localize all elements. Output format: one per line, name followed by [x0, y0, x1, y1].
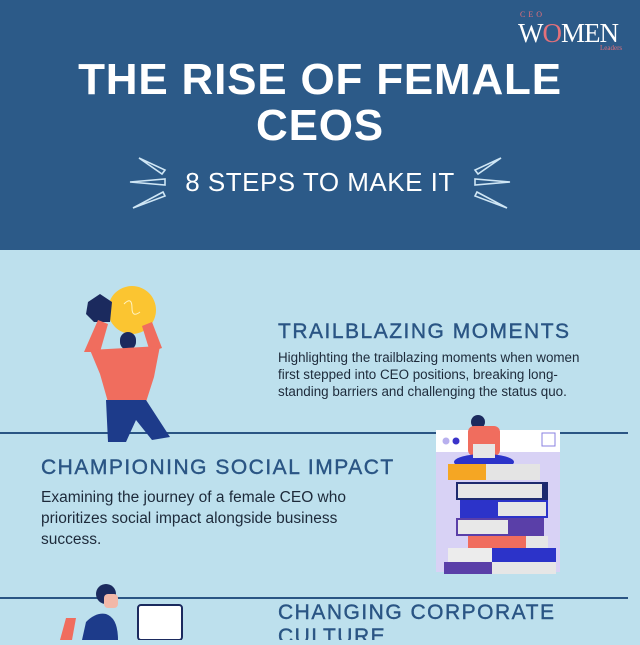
header panel	[0, 0, 640, 250]
section 1: trailblazing moments	[278, 320, 579, 399]
heading: CHAMPIONING SOCIAL IMPACT	[41, 456, 395, 479]
logo: CEO	[520, 10, 545, 19]
title	[78, 55, 562, 150]
logo: Leaders	[600, 44, 622, 52]
divider lines	[0, 432, 628, 434]
heading	[278, 601, 555, 640]
heading: TRAILBLAZING MOMENTS	[278, 320, 571, 343]
title: CEOS	[256, 101, 384, 150]
logo: WOMEN	[518, 18, 618, 48]
subtitle with burst icons	[130, 157, 510, 209]
subtitle with burst icons: 8 STEPS TO MAKE IT	[185, 167, 455, 197]
section 3: changing corporate culture	[278, 601, 555, 640]
icon: man holding lightbulb	[84, 286, 170, 442]
icon: person on stack of books	[436, 415, 560, 574]
heading: CHANGING CORPORATE	[278, 601, 555, 624]
text: Highlighting the trailblazing moments when women first stepped into CEO positions, breaking long-standing barriers and challenging the status quo.	[278, 350, 579, 399]
text: Examining the journey of a female CEO who prioritizes social impact alongside business success.	[41, 489, 346, 548]
icon: man at computer	[60, 584, 183, 640]
title: THE RISE OF FEMALE	[78, 55, 562, 104]
section 2: championing social impact	[41, 456, 395, 548]
logo	[518, 10, 622, 52]
